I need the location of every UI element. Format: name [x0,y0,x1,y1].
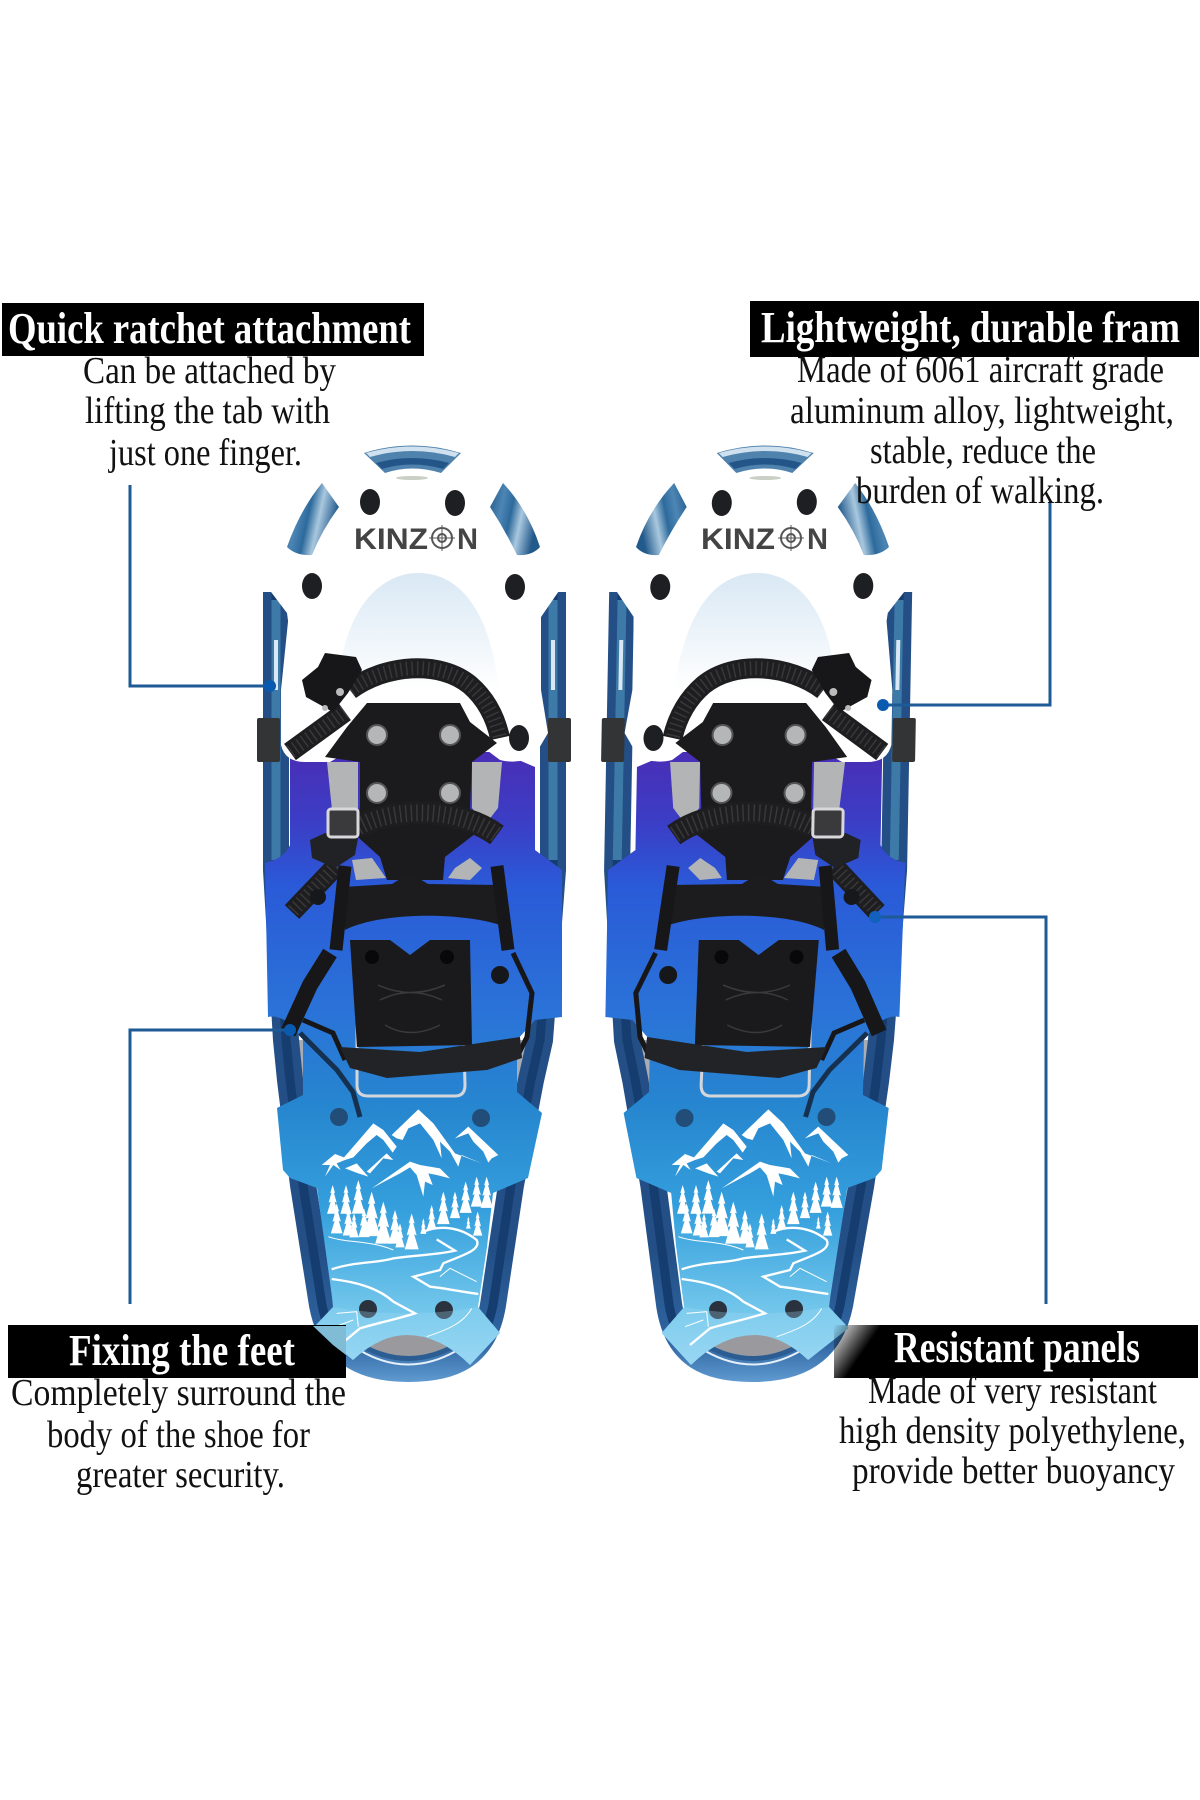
leader line: fixing the feet [130,1024,296,1304]
rail tip cut-outs [268,588,561,628]
heel pad [350,940,472,1047]
toe frame arcs [287,446,540,555]
logo left: KINZ [354,523,428,556]
callout: fixing the feet: greater security. [76,1454,285,1496]
callout: quick ratchet attachment: just one finger. [107,432,302,474]
callout: quick ratchet attachment: Quick ratchet attachment [8,304,411,353]
deck artwork left: mountains, trees and river [322,1109,498,1345]
leader line: resistant panels [869,911,1046,1304]
lower ratchet strap [292,813,497,912]
callout: quick ratchet attachment [2,303,424,474]
logo right: KINZ [701,523,775,556]
callout: lightweight, durable frame: burden of walking. [856,470,1104,512]
heel strap [340,1037,522,1078]
rail strap bands [257,718,571,762]
tail flap highlight [313,1307,500,1365]
callout: resistant panels: Resistant panels [894,1323,1140,1372]
grey heel notch [362,1330,454,1364]
ball rivet [491,966,509,984]
grey side patches [290,1040,532,1130]
snowshoe left [257,446,571,1369]
callout: lightweight, durable frame [750,301,1199,512]
plate rivets [302,489,529,751]
callout: quick ratchet attachment: lifting the tab with [85,390,330,432]
deck artwork right [672,1109,848,1345]
upper ratchet buckle [302,653,362,712]
pine trees [327,1177,493,1249]
logo right [701,523,828,556]
upper ratchet strap [290,668,500,752]
aluminium tube frame [276,592,553,1369]
silver side brackets [327,762,502,880]
callout: fixing the feet: Completely surround the [11,1372,346,1414]
silver heel frame [357,1010,465,1096]
mountain peaks [322,1109,498,1197]
ankle straps and buckle [288,866,532,1117]
callout: fixing the feet: body of the shoe for [47,1414,310,1456]
callout: resistant panels: Made of very resistant [868,1370,1157,1412]
panel rivets [330,1108,490,1319]
white front plate [281,570,548,762]
logo left [354,523,478,556]
binding toe plate [325,703,497,880]
pale dome over plate [337,573,501,710]
plastic deck gradient panel [265,752,562,1365]
snowshoe right [590,446,921,1369]
logo left: N [457,523,478,556]
logo right: N [807,523,828,556]
callout: lightweight, durable frame: stable, reduce the [870,430,1096,472]
mid foot strap [343,873,500,930]
callout: fixing the feet [8,1325,346,1496]
lower ratchet buckle [310,809,358,905]
callout: fixing the feet: Fixing the feet [69,1326,295,1375]
leader line: quick ratchet [130,485,276,692]
river lines [328,1228,478,1345]
silver bolts [367,725,460,803]
callout: resistant panels [834,1323,1198,1492]
leader line: lightweight frame [877,503,1050,711]
callout: quick ratchet attachment: Can be attached by [83,350,336,392]
